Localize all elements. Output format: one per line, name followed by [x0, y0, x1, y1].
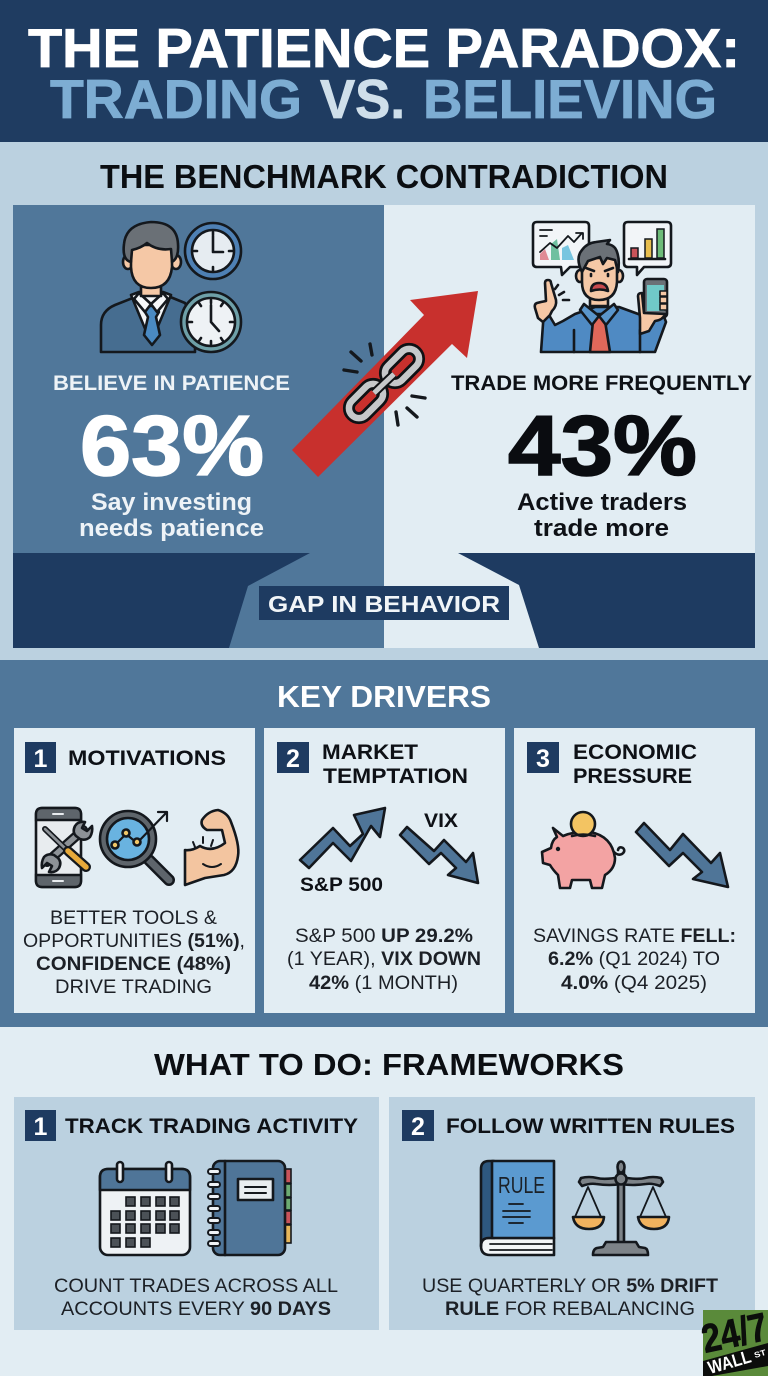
panel: believe in patience — [13, 205, 384, 648]
panel: motivations — [14, 728, 255, 1013]
description: needs patience — [79, 515, 264, 542]
icon: balance scale — [573, 1162, 669, 1255]
description: 4.0% (Q4 2025) — [561, 973, 707, 994]
badge 1 — [25, 742, 56, 773]
icon: rule book: RULE — [498, 1172, 545, 1198]
badge 1: 1 — [34, 1113, 48, 1141]
description — [533, 926, 736, 994]
badge 3 — [527, 742, 559, 773]
card title: TEMPTATION — [323, 765, 468, 788]
clock top — [185, 223, 241, 279]
badge 2: 2 — [286, 745, 300, 773]
section: frameworks — [0, 1027, 768, 1376]
title: BELIEVING — [423, 68, 717, 130]
header band — [0, 0, 768, 142]
chart arrow: S&P 500 up — [300, 808, 385, 868]
description — [23, 908, 245, 998]
description: 42% (1 MONTH) — [309, 973, 458, 994]
description: ACCOUNTS EVERY 90 DAYS — [61, 1299, 331, 1320]
card title: TRACK TRADING ACTIVITY — [65, 1115, 358, 1138]
arrow: contradiction — [292, 291, 478, 477]
sparks — [344, 344, 425, 425]
icon: magnifier with chart — [100, 811, 169, 880]
section heading: WHAT TO DO: FRAMEWORKS — [154, 1047, 624, 1082]
description: 6.2% (Q1 2024) TO — [548, 949, 720, 970]
description: DRIVE TRADING — [55, 977, 212, 998]
icon: phone with tools — [36, 808, 92, 887]
badge 2 — [402, 1110, 434, 1141]
icon: notebook — [208, 1161, 291, 1255]
panel: follow written rules — [389, 1097, 755, 1330]
icon: rule book — [481, 1161, 554, 1255]
description: Say investing — [91, 489, 252, 516]
card title: MOTIVATIONS — [68, 747, 226, 770]
gap in behavior banner — [13, 553, 755, 648]
description: USE QUARTERLY OR 5% DRIFT — [422, 1276, 718, 1297]
label: TRADE MORE FREQUENTLY — [451, 372, 752, 395]
badge 2: 2 — [411, 1113, 425, 1141]
section: key drivers — [0, 660, 768, 1027]
section: benchmark contradiction — [0, 142, 768, 660]
label: S&P 500: S&P 500 — [300, 875, 383, 896]
description: SAVINGS RATE FELL: — [533, 926, 736, 947]
badge 3: 3 — [536, 745, 550, 773]
description — [287, 926, 481, 994]
description: BETTER TOOLS & — [50, 908, 217, 929]
card title — [322, 741, 468, 788]
gap in behavior banner: GAP IN BEHAVIOR — [268, 591, 500, 617]
icon: calendar — [100, 1162, 190, 1255]
description — [54, 1276, 338, 1320]
icon: broken chain — [344, 344, 425, 425]
description: trade more — [534, 515, 669, 542]
badge 2 — [277, 742, 309, 773]
stat: 63%: 63% — [80, 399, 264, 494]
icon: flexed arm — [185, 810, 238, 885]
description: (1 YEAR), VIX DOWN — [287, 949, 481, 970]
section heading: KEY DRIVERS — [277, 679, 491, 714]
description: Active traders — [517, 489, 687, 516]
panel: market temptation — [264, 728, 505, 1013]
panel: track trading activity — [14, 1097, 379, 1330]
card title — [573, 741, 697, 788]
description: S&P 500 UP 29.2% — [295, 926, 473, 947]
card title: FOLLOW WRITTEN RULES — [446, 1115, 735, 1138]
icon: piggy bank — [542, 812, 624, 888]
description: COUNT TRADES ACROSS ALL — [54, 1276, 338, 1297]
logo: 24/7 Wall St: ST — [753, 1348, 767, 1360]
title: TRADING — [50, 68, 302, 130]
chart arrow: savings down — [636, 823, 728, 887]
screwdriver — [45, 829, 70, 853]
icon: stressed trader — [533, 222, 671, 352]
label: BELIEVE IN PATIENCE — [53, 372, 290, 395]
card title: PRESSURE — [573, 765, 692, 788]
card title: ECONOMIC — [573, 741, 697, 764]
wrench — [47, 830, 83, 862]
description — [422, 1276, 718, 1320]
badge 1 — [25, 1110, 56, 1141]
card title: MARKET — [322, 741, 418, 764]
badge 1: 1 — [34, 745, 48, 773]
description — [517, 489, 687, 542]
description: RULE FOR REBALANCING — [445, 1299, 695, 1320]
title — [28, 17, 740, 130]
panel: trade more frequently — [384, 205, 755, 648]
chart arrow: VIX down — [400, 827, 478, 883]
description — [79, 489, 264, 542]
clock bottom — [181, 292, 241, 352]
section heading: THE BENCHMARK CONTRADICTION — [100, 158, 668, 195]
title: THE PATIENCE PARADOX: — [28, 17, 740, 79]
description: CONFIDENCE (48%) — [36, 954, 231, 975]
description: OPPORTUNITIES (51%), — [23, 931, 245, 952]
panel: economic pressure — [514, 728, 755, 1013]
label: VIX: VIX — [424, 811, 458, 832]
icon: businessman with clocks — [101, 222, 241, 352]
title: VS. — [320, 68, 405, 130]
stat: 43%: 43% — [508, 399, 697, 494]
